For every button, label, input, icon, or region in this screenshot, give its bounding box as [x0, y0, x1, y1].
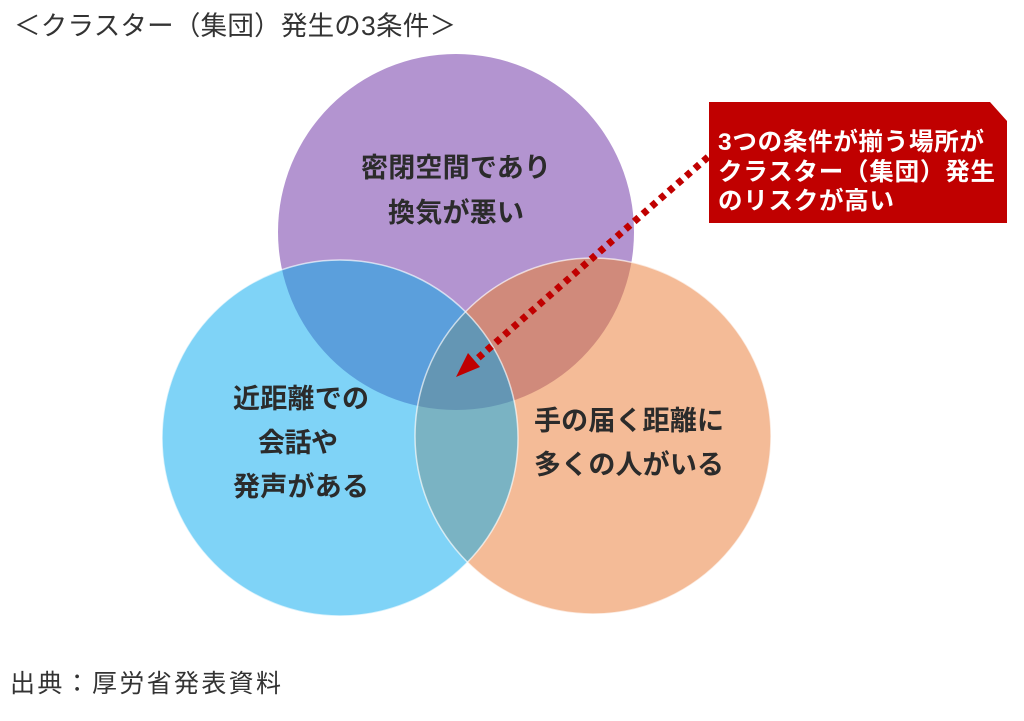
label: enclosed space: 密閉空間であり: [361, 153, 551, 183]
callout: のリスクが高い: [718, 186, 894, 215]
overlap: purple and orange: [466, 258, 632, 400]
label: close conversation: 発声がある: [233, 471, 369, 502]
circle: enclosed space: [278, 54, 634, 410]
callout: 3つの条件が揃う場所が: [718, 127, 984, 156]
overlap: purple and blue: [282, 260, 465, 406]
label: close conversation: [233, 384, 369, 502]
label: enclosed space: 換気が悪い: [388, 197, 524, 228]
label: close conversation: 会話や: [258, 428, 338, 458]
circle: within reach: [415, 258, 771, 614]
label: within reach: 手の届く距離に: [534, 406, 724, 436]
label: close conversation: 近距離での: [233, 384, 369, 414]
label: within reach: 多くの人がいる: [534, 449, 724, 480]
overlap: blue and orange: [415, 400, 518, 562]
venn diagram: [162, 54, 771, 616]
callout: [709, 102, 1007, 223]
title: ＜クラスター（集団）発生の3条件＞: [14, 11, 456, 41]
callout: クラスター（集団）発生: [718, 158, 995, 186]
label: enclosed space: [361, 153, 551, 228]
dotted arrow: [456, 157, 708, 377]
overlap: all three: [418, 312, 514, 410]
circle outlines: [162, 258, 771, 616]
source note: 出典：厚労省発表資料: [10, 670, 281, 698]
circle: close conversation: [162, 260, 518, 616]
label: within reach: [534, 406, 724, 480]
